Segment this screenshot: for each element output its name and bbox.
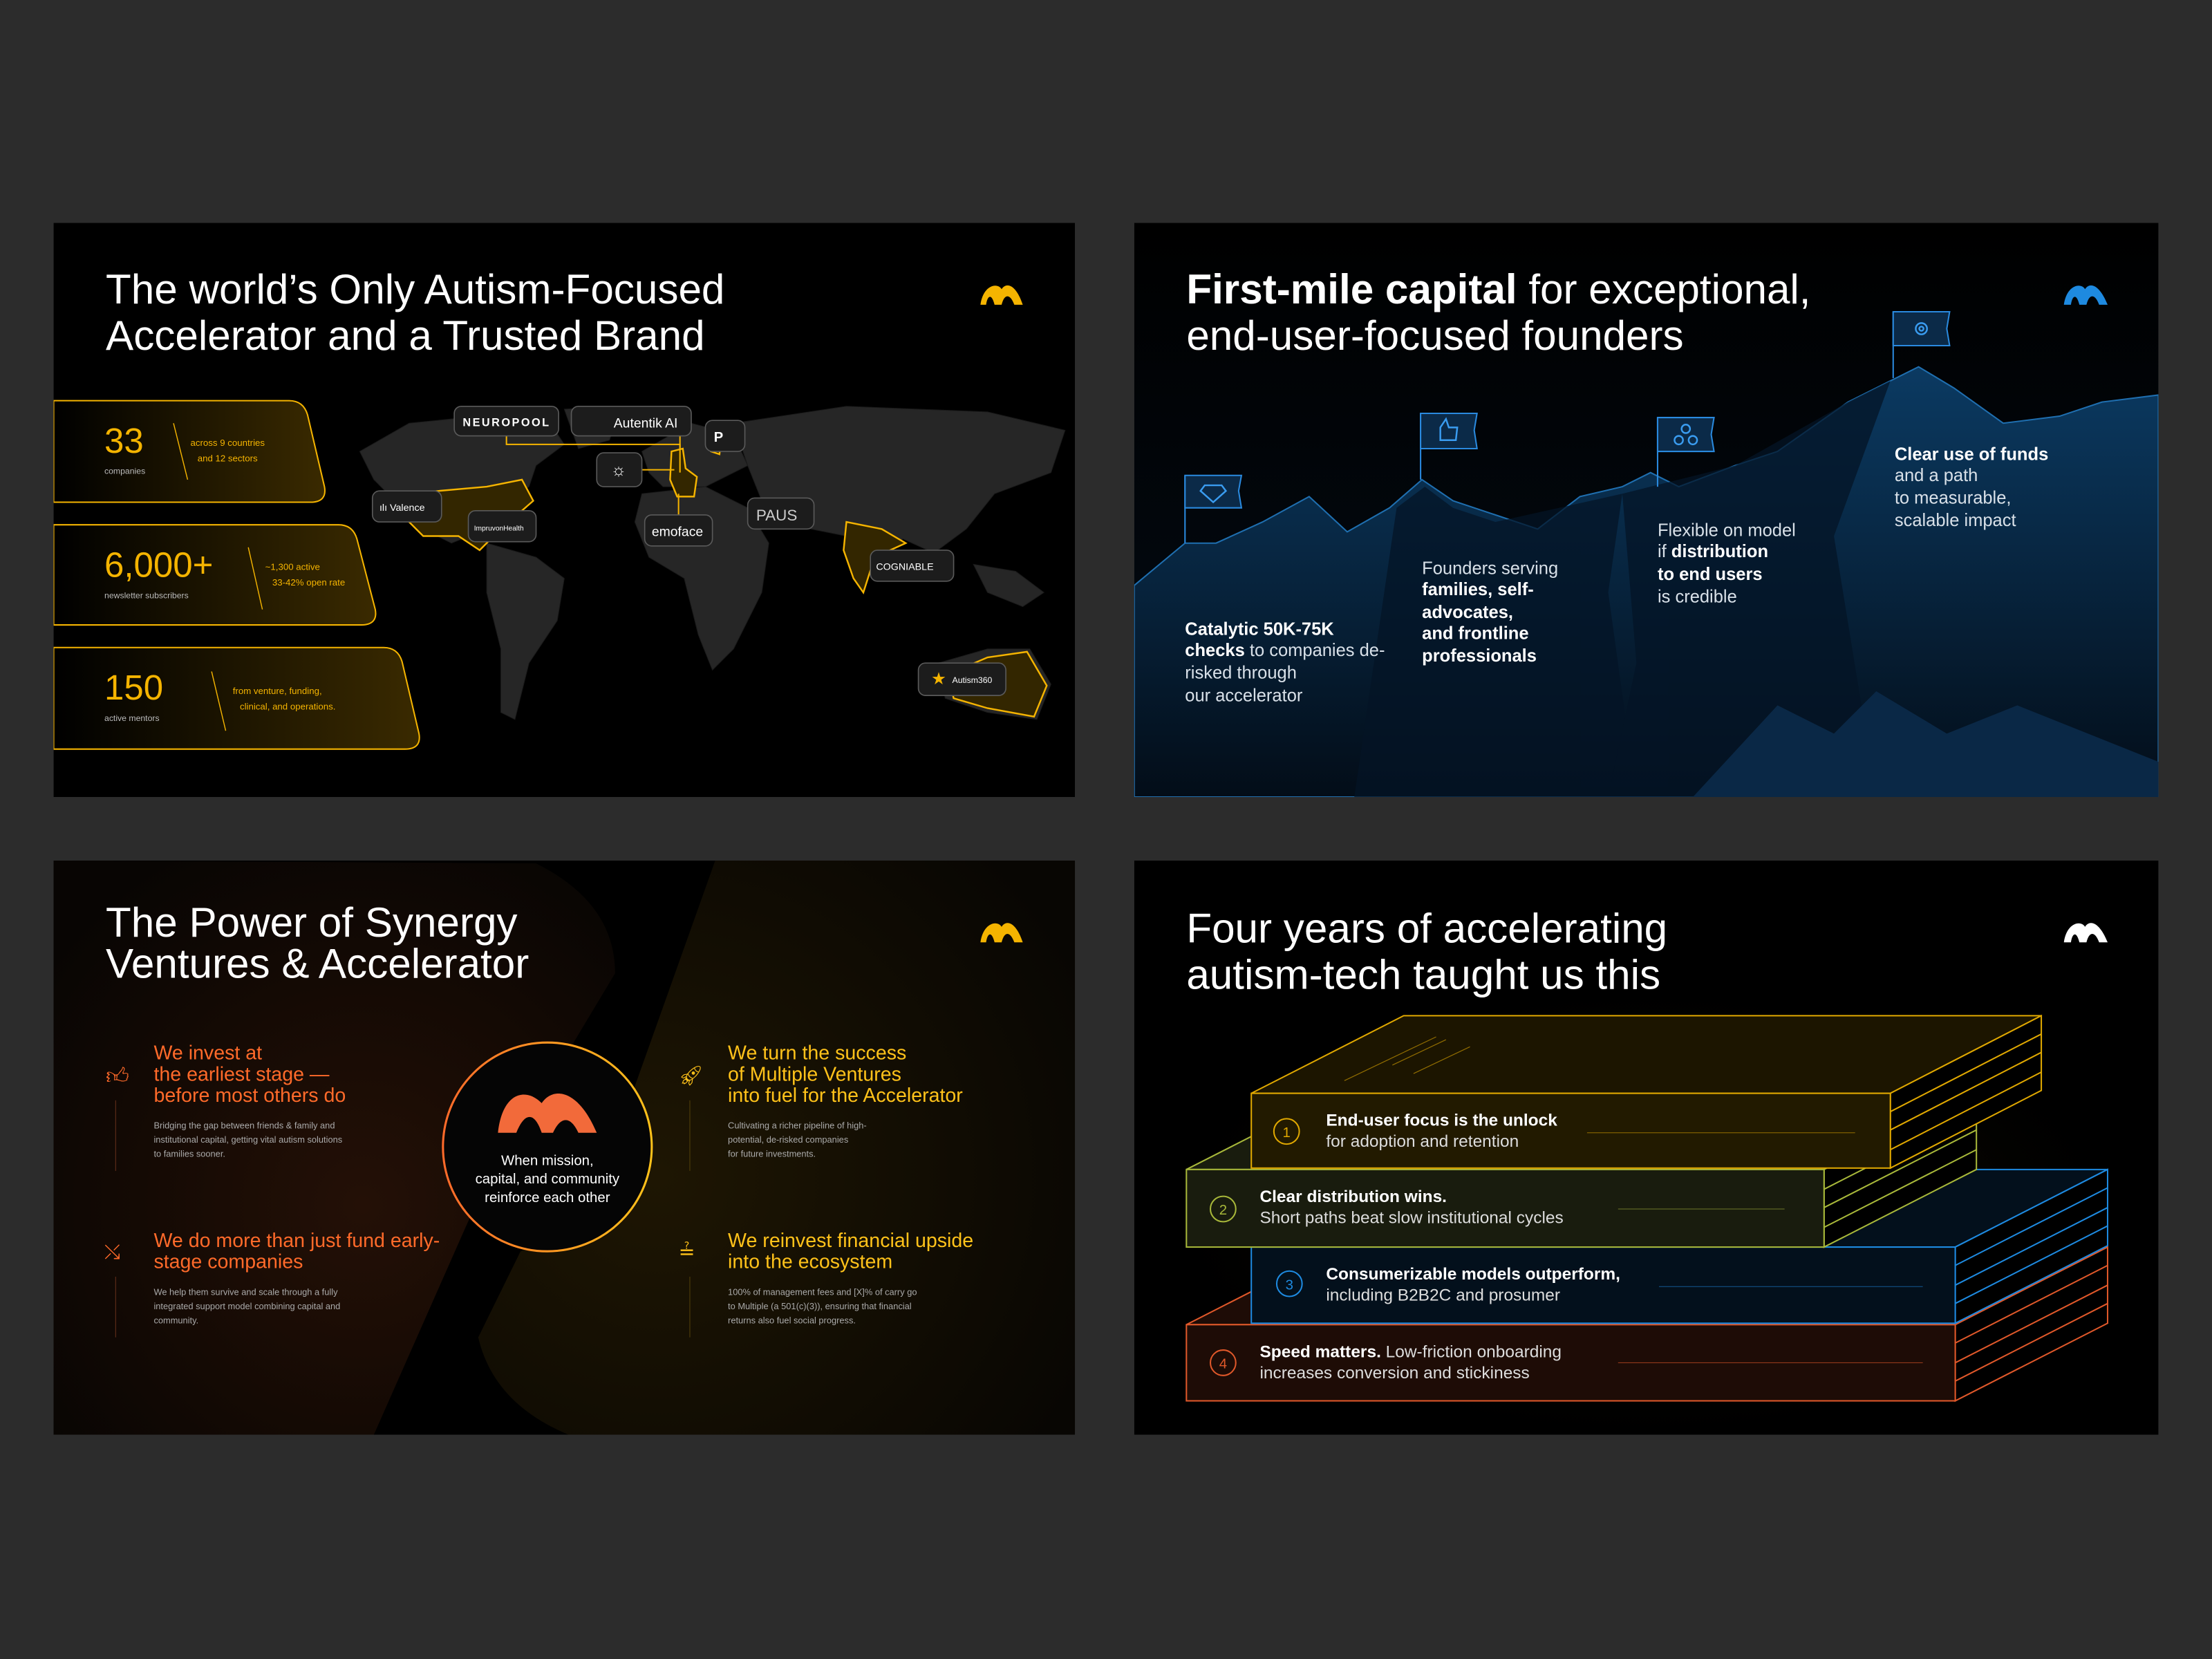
text blocks: advocates, xyxy=(1422,603,1513,622)
slab 3: 3 xyxy=(1286,1277,1293,1293)
center circle: When mission, xyxy=(501,1154,594,1169)
panel: first-mile capital: end-user-focused founders xyxy=(1186,312,1684,359)
flags xyxy=(1185,312,1949,543)
panel: autism-focused accelerator: NEUROPOOL xyxy=(462,416,551,429)
panel: autism-focused accelerator: Autentik AI xyxy=(614,415,677,431)
text blocks: checks to companies de- xyxy=(1185,641,1385,660)
panel: autism-focused accelerator: COGNIABLE xyxy=(876,561,934,572)
logo xyxy=(980,285,1023,305)
item: reinvest upside: into the ecosystem xyxy=(728,1251,892,1273)
panel: autism-focused accelerator: ★ xyxy=(931,670,946,688)
text blocks: risked through xyxy=(1185,664,1297,683)
panel: power of synergy: Ventures & Accelerator xyxy=(106,940,529,986)
stat card: 6000+ subscribers: 33-42% open rate xyxy=(272,577,345,588)
stat card: 33 companies xyxy=(54,401,325,503)
item: invest earliest xyxy=(106,1042,346,1171)
title: The Power of Synergy xyxy=(106,899,518,946)
item: reinvest upside: to Multiple (a 501(c)(3)), ensuring that financial xyxy=(728,1301,912,1311)
world map xyxy=(359,406,1065,720)
slab 2: Clear distribution wins. xyxy=(1259,1188,1447,1206)
slab 3: including B2B2C and prosumer xyxy=(1326,1286,1560,1305)
panel: autism-focused accelerator: PAUS xyxy=(756,507,797,524)
panel: autism-focused accelerator: ☼ xyxy=(611,461,626,480)
item: invest earliest: We invest at xyxy=(153,1042,262,1065)
item: invest earliest: to families sooner. xyxy=(153,1148,225,1159)
center circle: reinforce each other xyxy=(485,1190,610,1206)
text blocks: to measurable, xyxy=(1895,489,2012,508)
text blocks: to end users xyxy=(1658,565,1763,584)
panel: autism-focused accelerator: ImpruvonHealth xyxy=(474,525,524,532)
text blocks: and a path xyxy=(1895,466,1978,485)
slab 2: 2 xyxy=(1219,1203,1227,1218)
panel: autism-focused accelerator: Autism360 xyxy=(953,675,993,685)
text blocks: scalable impact xyxy=(1895,511,2016,530)
item: turn success xyxy=(679,1042,963,1171)
item: more than fund: We help them survive and scale through a fully xyxy=(153,1286,338,1297)
item: more than fund: stage companies xyxy=(153,1251,303,1273)
text blocks: professionals xyxy=(1422,646,1537,666)
stat card: 150 mentors: active mentors xyxy=(104,713,160,723)
text blocks: Catalytic 50K-75K xyxy=(1185,619,1334,639)
text blocks xyxy=(1185,444,2048,705)
center circle: capital, and community xyxy=(476,1172,620,1187)
item: turn success: Cultivating a richer pipeline of high- xyxy=(728,1121,867,1131)
panel: first-mile capital xyxy=(1134,223,2158,797)
panel: power of synergy xyxy=(54,861,1075,1435)
item: invest earliest: institutional capital, getting vital autism solutions xyxy=(153,1134,342,1145)
item: more than fund: integrated support model combining capital and xyxy=(153,1301,340,1311)
panel: autism-focused accelerator: emoface xyxy=(652,525,703,540)
slab 2 xyxy=(1186,1092,1976,1247)
slab 1: End-user focus is the unlock xyxy=(1326,1112,1557,1130)
slab 1 xyxy=(1251,1015,2041,1168)
stat card: 6000+ subscribers: 6,000+ xyxy=(104,545,213,585)
item: reinvest upside xyxy=(679,1230,973,1338)
slab 2: Short paths beat slow institutional cycles xyxy=(1259,1208,1564,1227)
item: more than fund: ⤯ xyxy=(104,1241,120,1263)
slab 3: Consumerizable models outperform, xyxy=(1326,1265,1620,1284)
item: turn success: We turn the success xyxy=(728,1042,906,1065)
logo xyxy=(980,923,1023,942)
company badges xyxy=(373,406,1006,695)
text blocks: is credible xyxy=(1658,587,1737,606)
panel: autism-focused accelerator: Accelerator and a Trusted Brand xyxy=(106,312,705,359)
item: turn success: of Multiple Ventures xyxy=(728,1063,901,1085)
center circle xyxy=(443,1042,652,1251)
text blocks: Flexible on model xyxy=(1658,521,1796,541)
item: more than fund xyxy=(104,1230,440,1338)
stat card: 150 mentors: clinical, and operations. xyxy=(240,702,335,712)
mountains xyxy=(1134,367,2158,797)
text blocks: our accelerator xyxy=(1185,686,1303,705)
map highlights xyxy=(406,430,1047,717)
stat card: 150 mentors: from venture, funding, xyxy=(233,686,322,696)
stat card: 33 companies: companies xyxy=(104,467,145,476)
stat card: 6000+ subscribers: newsletter subscribers xyxy=(104,590,189,600)
text blocks: Founders serving xyxy=(1422,559,1558,579)
slab 4: Speed matters. Low-friction onboarding xyxy=(1259,1342,1562,1361)
stat card: 33 companies: 33 xyxy=(104,421,144,460)
title: The world’s Only Autism-Focused xyxy=(106,266,724,312)
item: reinvest upside: ≟ xyxy=(679,1241,695,1263)
item: invest earliest: before most others do xyxy=(153,1085,346,1107)
stat card: 150 mentors xyxy=(54,648,420,749)
item: turn success: into fuel for the Accelerator xyxy=(728,1085,963,1107)
title: Four years of accelerating xyxy=(1186,905,1667,951)
text blocks: families, self- xyxy=(1422,580,1534,599)
text blocks: and frontline xyxy=(1422,624,1529,643)
panel: autism-focused accelerator xyxy=(54,223,1075,797)
item: invest earliest: 👍︎ xyxy=(106,1062,129,1088)
connector lines xyxy=(507,436,680,515)
item: more than fund: We do more than just fund early- xyxy=(153,1230,440,1252)
panel: four years: autism-tech taught us this xyxy=(1186,952,1660,998)
item: invest earliest: the earliest stage — xyxy=(153,1063,330,1085)
item: more than fund: community. xyxy=(153,1315,198,1325)
stat card: 33 companies: and 12 sectors xyxy=(198,453,258,463)
item: reinvest upside: We reinvest financial upside xyxy=(728,1230,973,1252)
slab 1: 1 xyxy=(1283,1125,1291,1141)
stat card: 150 mentors: 150 xyxy=(104,668,163,707)
panel: autism-focused accelerator: ılı Valence xyxy=(379,503,425,514)
slab 4 xyxy=(1186,1247,2108,1401)
slab 4: 4 xyxy=(1219,1357,1227,1372)
slab 1: for adoption and retention xyxy=(1326,1132,1519,1151)
stat card: 6000+ subscribers: ~1,300 active xyxy=(265,561,320,572)
slab 3 xyxy=(1251,1170,2108,1323)
item: reinvest upside: returns also fuel social progress. xyxy=(728,1315,856,1325)
stat card: 33 companies: across 9 countries xyxy=(191,438,265,448)
title: First-mile capital for exceptional, xyxy=(1186,266,1811,312)
panel: four years xyxy=(1134,861,2158,1453)
item: reinvest upside: 100% of management fees and [X]% of carry go xyxy=(728,1286,917,1297)
item: turn success: potential, de-risked companies xyxy=(728,1134,848,1145)
item: invest earliest: Bridging the gap between friends & family and xyxy=(153,1121,335,1131)
slab 4: increases conversion and stickiness xyxy=(1259,1364,1530,1382)
item: turn success: 🚀︎ xyxy=(679,1065,704,1087)
panel: autism-focused accelerator: P xyxy=(714,430,723,445)
stat card: 6000+ subscribers xyxy=(54,525,375,625)
logo xyxy=(2064,923,2108,942)
logo xyxy=(2064,285,2108,305)
text blocks: Clear use of funds xyxy=(1895,444,2048,464)
item: turn success: for future investments. xyxy=(728,1148,816,1159)
text blocks: if distribution xyxy=(1658,542,1768,561)
